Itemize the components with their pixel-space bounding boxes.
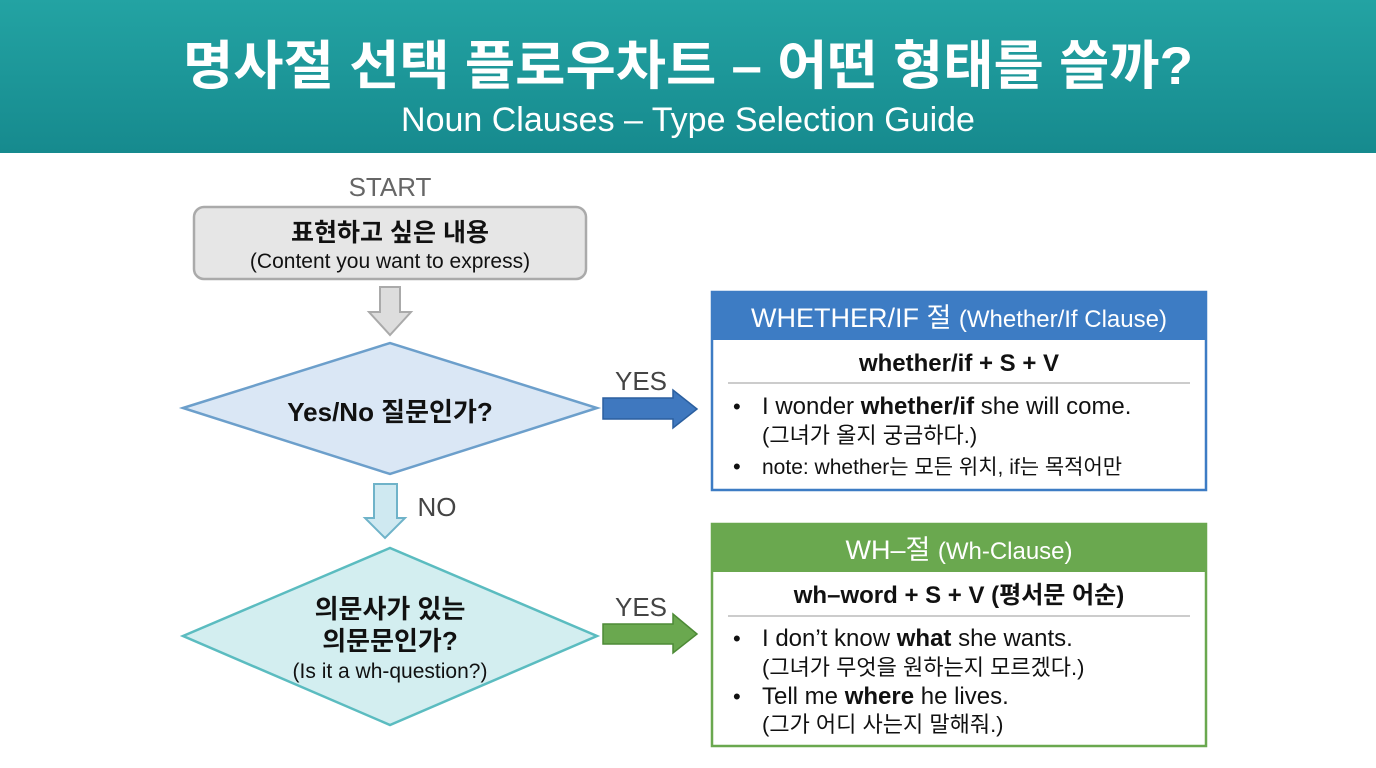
- panel: wh-clause: I don’t know what she wants.: [762, 625, 1073, 652]
- decision 2: [183, 548, 597, 725]
- arrow: YES to whether: YES: [615, 366, 667, 396]
- title: 명사절 선택 플로우차트 – 어떤 형태를 쓸까?: [183, 37, 1193, 96]
- panel: wh-clause: wh–word + S + V (평서문 어순): [793, 582, 1124, 609]
- decision 1: Yes/No 질문인가?: [287, 397, 493, 427]
- decision 2: (Is it a wh-question?): [293, 660, 487, 683]
- start box: 표현하고 싶은 내용: [291, 219, 489, 247]
- panel: whether/if clause: I wonder whether/if she will come.: [762, 393, 1131, 420]
- panel: wh-clause: [712, 524, 1206, 746]
- arrow: NO: [365, 484, 456, 538]
- arrow: NO: NO: [418, 492, 456, 522]
- arrow: YES to wh: [603, 592, 697, 653]
- panel: whether/if clause: •: [733, 454, 741, 479]
- panel: wh-clause: (그가 어디 사는지 말해줘.): [762, 712, 1004, 737]
- panel: wh-clause: •: [733, 626, 741, 651]
- panel: whether/if clause: (그녀가 올지 궁금하다.): [762, 423, 977, 448]
- start label: START: [349, 172, 432, 202]
- subtitle: Noun Clauses – Type Selection Guide: [401, 101, 975, 139]
- decision 1: [183, 343, 597, 474]
- start box: [194, 207, 586, 279]
- panel: wh-clause: •: [733, 684, 741, 709]
- panel: whether/if clause: whether/if + S + V: [858, 350, 1059, 377]
- arrow: YES to wh: YES: [615, 592, 667, 622]
- panel: whether/if clause: note: whether는 모든 위치, if는 목적어만: [762, 456, 1122, 479]
- header banner: [0, 0, 1376, 153]
- decision 2: 의문문인가?: [322, 626, 458, 656]
- start box: (Content you want to express): [250, 250, 530, 273]
- arrow: YES to whether: [603, 366, 697, 428]
- panel: whether/if clause: [712, 292, 1206, 490]
- panel: whether/if clause: WHETHER/IF 절 (Whether/If Clause): [751, 303, 1167, 333]
- panel: wh-clause: Tell me where he lives.: [762, 683, 1009, 710]
- arrow: start to decision 1: [369, 287, 411, 335]
- panel: wh-clause: WH–절 (Wh-Clause): [845, 535, 1073, 565]
- panel: wh-clause: (그녀가 무엇을 원하는지 모르겠다.): [762, 655, 1084, 680]
- decision 2: 의문사가 있는: [315, 594, 465, 624]
- panel: whether/if clause: •: [733, 394, 741, 419]
